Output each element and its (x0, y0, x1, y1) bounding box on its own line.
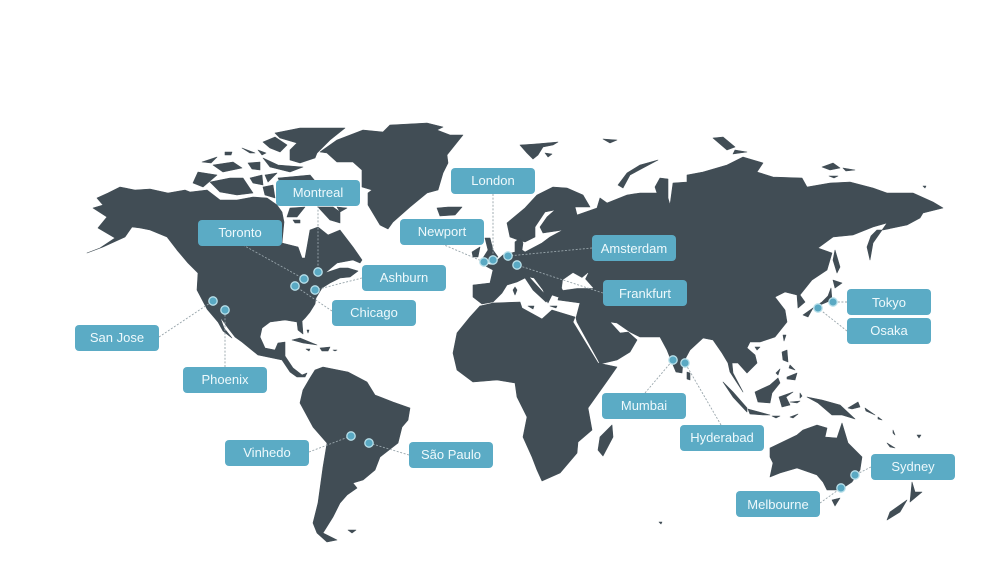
marker: Frankfurt (513, 261, 521, 269)
label: Frankfurt (603, 280, 687, 306)
landmass: New Zealand (887, 482, 922, 520)
label: Phoenix: Phoenix (202, 372, 249, 387)
landmass: Japan and East Asian islands (755, 250, 842, 350)
label: Tokyo (847, 289, 931, 315)
label: San Jose: San Jose (90, 330, 144, 345)
label: Frankfurt: Frankfurt (619, 286, 671, 301)
map landmasses (87, 123, 943, 542)
landmass: Mediterranean islands and Sri Lanka (513, 287, 690, 380)
label: São Paulo (409, 442, 493, 468)
label: Vinhedo: Vinhedo (243, 445, 291, 460)
marker: Newport (480, 258, 488, 266)
marker: Hyderabad (681, 359, 689, 367)
label: Toronto (198, 220, 282, 246)
landmass: Arctic Canada islands (193, 128, 347, 223)
sea: Black Sea (562, 273, 593, 290)
label: Sydney: Sydney (891, 459, 935, 474)
label: Chicago: Chicago (350, 305, 398, 320)
label: Phoenix (183, 367, 267, 393)
landmass: Arctic Eurasia islands (520, 137, 926, 188)
landmass: Australia and Tasmania (770, 423, 862, 506)
marker: São Paulo (365, 439, 373, 447)
marker: Phoenix (221, 306, 229, 314)
label: Melbourne (736, 491, 820, 517)
marker: Montreal (314, 268, 322, 276)
label: Hyderabad: Hyderabad (690, 430, 754, 445)
label: Tokyo: Tokyo (872, 295, 906, 310)
label: Ashburn: Ashburn (380, 270, 428, 285)
marker: London (489, 256, 497, 264)
label: Montreal (276, 180, 360, 206)
label: Chicago (332, 300, 416, 326)
marker: Melbourne (837, 484, 845, 492)
label: Amsterdam: Amsterdam (601, 241, 667, 256)
location markers (209, 252, 859, 492)
landmass: Madagascar (598, 425, 613, 456)
label: Vinhedo (225, 440, 309, 466)
landmass: New Guinea and Pacific islands (807, 397, 921, 448)
landmass: British Isles (472, 238, 498, 260)
landmass: small Indian Ocean island (659, 522, 662, 524)
label: Ashburn (362, 265, 446, 291)
landmass: Eurasia (473, 157, 943, 392)
marker: Mumbai (669, 356, 677, 364)
label: London (451, 168, 535, 194)
label: Newport: Newport (418, 224, 467, 239)
label: Sydney (871, 454, 955, 480)
landmass: Greenland (320, 123, 463, 229)
marker: Chicago (291, 282, 299, 290)
city labels (75, 168, 955, 517)
landmass: Southeast Asian islands (723, 350, 802, 418)
label: Mumbai: Mumbai (621, 398, 667, 413)
label: London: London (471, 173, 515, 188)
connector lines (159, 194, 871, 503)
marker: Sydney (851, 471, 859, 479)
label: Osaka: Osaka (870, 323, 909, 338)
landmass: South America (300, 367, 410, 542)
landmass: North America (87, 187, 362, 377)
marker: Tokyo (829, 298, 837, 306)
label: Montreal: Montreal (293, 185, 343, 200)
marker: Amsterdam (504, 252, 512, 260)
label: San Jose (75, 325, 159, 351)
label: Osaka (847, 318, 931, 344)
marker: Osaka (814, 304, 822, 312)
label: Toronto: Toronto (218, 225, 262, 240)
label: Mumbai (602, 393, 686, 419)
label: Hyderabad (680, 425, 764, 451)
marker: San Jose (209, 297, 217, 305)
landmass: Africa (453, 302, 617, 481)
label: Newport (400, 219, 484, 245)
marker: Vinhedo (347, 432, 355, 440)
marker: Ashburn (311, 286, 319, 294)
label: Amsterdam (592, 235, 676, 261)
marker: Toronto (300, 275, 308, 283)
label: São Paulo: São Paulo (421, 447, 481, 462)
landmass: Iceland (437, 207, 462, 216)
landmass: Caribbean and Falkland islands (292, 330, 356, 533)
label: Melbourne: Melbourne (747, 497, 809, 512)
